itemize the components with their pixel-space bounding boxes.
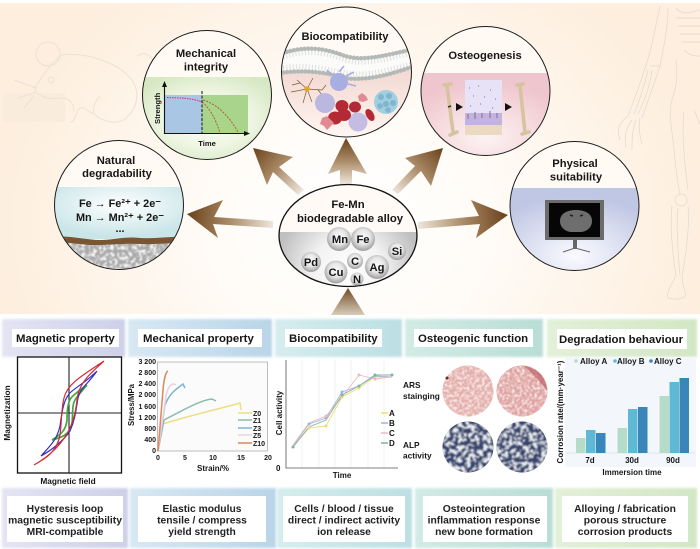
chart: cell activity: 0 xyxy=(276,464,281,473)
element spheres xyxy=(301,227,406,286)
arrow: to osteogenesis xyxy=(392,148,443,194)
chart: corrosion rate bars: Alloy C xyxy=(654,357,682,366)
chart: strength vs time: Strength xyxy=(153,92,162,124)
text box: mechanical summary xyxy=(130,488,276,548)
panel: mechanical property xyxy=(127,319,272,473)
chart: stress-strain curves: Z1 xyxy=(253,418,261,425)
chart: corrosion rate bars: Alloy A xyxy=(580,357,607,366)
stained wells: ARS xyxy=(442,366,548,416)
text box: mechanical summary: tensile / compress xyxy=(157,516,247,526)
chart: cell activity: B xyxy=(389,419,395,428)
panel: magnetic property xyxy=(2,319,125,486)
header: mechanical property: Mechanical property xyxy=(143,333,254,345)
header: mechanical property xyxy=(128,319,272,357)
icon: mouse outline xyxy=(3,42,156,122)
text box: biocompatibility summary: ion release xyxy=(317,527,371,538)
text box: magnetic summary: MRI-compatible xyxy=(27,527,104,538)
icon: neuron xyxy=(291,78,326,103)
chart: stress-strain curves: Stress/MPa xyxy=(127,383,136,426)
chart: corrosion rate bars: Alloy B xyxy=(617,357,645,366)
heading: Physical xyxy=(552,158,598,170)
text box: mechanical summary: yield strength xyxy=(168,527,236,538)
chart: cell activity xyxy=(275,360,398,480)
stained wells: ALP xyxy=(442,422,548,472)
arrow: to natural degradability xyxy=(187,200,273,238)
text box: biocompatibility summary: Cells / blood / tissue xyxy=(294,504,394,515)
equations: Fe → Fe²⁺ + 2e⁻ xyxy=(79,198,161,210)
panel: degradation behaviour xyxy=(547,319,697,477)
text box: degradation summary: corrosion products xyxy=(578,527,672,538)
circle: natural degradability xyxy=(54,140,184,270)
axis label: Magnetization xyxy=(2,385,12,441)
chart: stress-strain curves: 2 000 xyxy=(138,392,156,399)
circle: osteogenesis xyxy=(418,26,553,158)
axis label: Magnetic field xyxy=(40,476,96,486)
chart: stress-strain curves: 1 200 xyxy=(138,415,156,422)
text box: osteogenic summary: inflammation response xyxy=(428,516,541,526)
chart: stress-strain curves: 15 xyxy=(237,455,245,462)
header: biocompatibility xyxy=(275,319,402,357)
chart: stress-strain curves: Z3 xyxy=(253,426,261,433)
icon: human skeleton outline xyxy=(618,6,700,299)
chart: cell activity: C xyxy=(389,429,395,438)
header: degradation behaviour xyxy=(547,319,697,357)
element spheres: Cu xyxy=(329,267,344,279)
text box: osteogenic summary: Osteointegration xyxy=(443,504,525,515)
heading: suitability xyxy=(550,172,603,184)
equations: Mn → Mn²⁺ + 2e⁻ xyxy=(76,212,164,224)
chart: stress-strain curves: Z0 xyxy=(253,411,261,418)
chart: strength vs time: Time xyxy=(198,139,216,148)
chart: stress-strain curves: 1 600 xyxy=(138,404,156,411)
element spheres: Fe xyxy=(356,234,370,246)
chart: stress-strain curves: 20 xyxy=(264,455,272,462)
chart: hysteresis loop xyxy=(18,357,122,473)
chart: corrosion rate bars xyxy=(556,357,696,477)
text box: osteogenic summary: new bone formation xyxy=(435,527,533,538)
chart: stress-strain curves: 10 xyxy=(209,455,217,462)
panel: osteogenic function xyxy=(403,319,548,472)
header: degradation behaviour: Degradation behaviour xyxy=(559,334,684,346)
chart: stress-strain curves: Z5 xyxy=(253,433,261,440)
icon: red blood cells xyxy=(328,100,377,124)
heading: Osteogenesis xyxy=(448,50,522,62)
chart: cell activity: A xyxy=(389,409,395,418)
text box: mechanical summary: Elastic modulus xyxy=(163,504,241,515)
icon: healed bone xyxy=(517,84,529,134)
heading: degradability xyxy=(82,168,153,180)
heading: Fe-Mn xyxy=(331,199,365,211)
chart: strength vs time xyxy=(153,81,250,148)
arrow: to mechanical integrity xyxy=(253,148,304,195)
icon: tissue layers xyxy=(465,80,502,113)
text box: magnetic summary: Hysteresis loop xyxy=(27,504,103,515)
label: ARS staining: ARS xyxy=(403,380,421,390)
heading: Natural xyxy=(97,155,135,167)
chart: stress-strain curves: 5 xyxy=(183,455,187,462)
chart: corrosion rate bars: 30d xyxy=(625,456,639,465)
element spheres: Ag xyxy=(370,262,385,274)
label: ALP activity: ALP xyxy=(403,440,420,450)
icon: fractured bone xyxy=(444,84,457,135)
header: magnetic property xyxy=(2,319,125,357)
chart: stress-strain curves: Z10 xyxy=(253,441,265,448)
arrow: from property panels up to alloy xyxy=(331,288,365,315)
heading: biodegradable alloy xyxy=(297,213,404,225)
chart: stress-strain curves xyxy=(127,359,272,473)
label: ARS staining: stainging xyxy=(403,391,440,401)
arrow: to biocompatibility xyxy=(328,138,367,185)
chart: corrosion rate bars: Corrosion rate/(mm·year⁻¹) xyxy=(556,360,565,463)
text box: magnetic summary: magnetic susceptibility xyxy=(8,516,122,526)
circle: mechanical integrity xyxy=(140,30,275,162)
header: osteogenic function xyxy=(405,319,543,357)
panel: biocompatibility xyxy=(275,319,402,480)
element spheres: Mn xyxy=(332,234,348,246)
element spheres: Si xyxy=(392,246,402,258)
header: biocompatibility: Biocompatibility xyxy=(289,333,378,345)
chart: corrosion rate bars: 7d xyxy=(585,456,595,465)
chart: cell activity: D xyxy=(389,439,395,448)
chart: stress-strain curves: Strain/% xyxy=(197,464,229,473)
chart: stress-strain curves: 2 400 xyxy=(138,381,156,388)
arrow: to physical suitability xyxy=(418,200,508,238)
text box: osteogenic summary xyxy=(415,488,553,548)
icon: MRI monitor xyxy=(545,200,604,252)
chart: corrosion rate bars: 90d xyxy=(666,456,680,465)
chart: cell activity: Time xyxy=(333,471,352,480)
equations: ... xyxy=(115,223,125,235)
text box: magnetic summary xyxy=(2,488,128,548)
chart: stress-strain curves: 0 xyxy=(156,455,160,462)
heading: integrity xyxy=(184,62,229,74)
element spheres: C xyxy=(351,256,359,268)
element spheres: N xyxy=(353,274,361,286)
icon: platelets xyxy=(320,93,368,130)
background panel xyxy=(0,3,700,314)
circle: biocompatibility xyxy=(280,7,415,140)
icon: immune cells xyxy=(330,73,348,91)
icon: arrowheads xyxy=(456,103,512,111)
chart: stress-strain curves: 3 200 xyxy=(138,359,156,366)
header: osteogenic function: Osteogenic function xyxy=(418,333,528,345)
text box: degradation summary: porous structure xyxy=(584,516,666,526)
chart: stress-strain curves: 0 xyxy=(152,448,156,455)
chart: stress-strain curves: 2 800 xyxy=(138,370,156,377)
text box: biocompatibility summary xyxy=(277,488,412,548)
text box: degradation summary: Alloying / fabrication xyxy=(574,504,676,515)
element spheres: Pd xyxy=(304,257,318,269)
circle: physical suitability xyxy=(508,142,643,273)
text box: biocompatibility summary: direct / indirect activity xyxy=(288,516,400,526)
heading: Biocompatibility xyxy=(301,31,389,43)
panel: Fe-Mn biodegradable alloy xyxy=(275,184,421,290)
chart: cell activity: Cell activity xyxy=(275,390,284,435)
text box: degradation summary xyxy=(555,488,697,548)
label: ALP activity: activity xyxy=(403,450,432,460)
chart: corrosion rate bars: Immersion time xyxy=(602,468,662,477)
chart: stress-strain curves: 800 xyxy=(144,426,156,433)
header: magnetic property: Magnetic property xyxy=(16,333,115,345)
chart: stress-strain curves: 400 xyxy=(144,437,156,444)
heading: Mechanical xyxy=(176,48,236,60)
